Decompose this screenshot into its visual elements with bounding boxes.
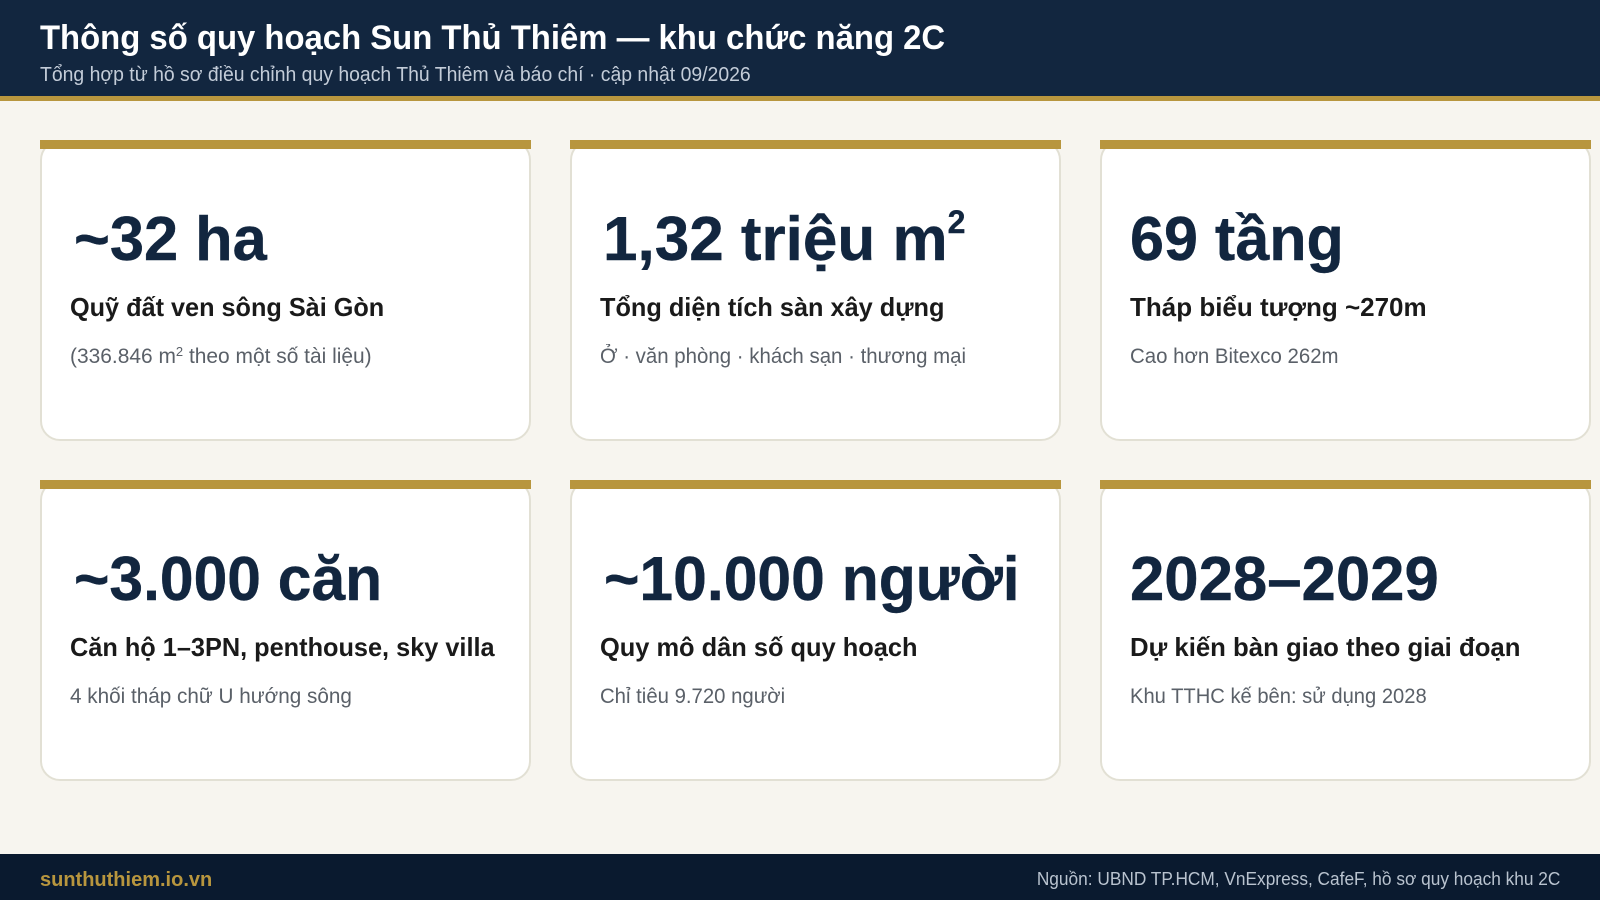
card: population: [570, 480, 1061, 780]
footer band: [0, 854, 1600, 900]
card: floor area: [570, 140, 1061, 440]
label: land area: Quỹ đất ven sông Sài Gòn: [70, 292, 384, 322]
label: tower height: Tháp biểu tượng ~270m: [1130, 292, 1427, 322]
card: apartments: [40, 480, 531, 780]
footer brand: sunthuthiem.io.vn: [40, 869, 212, 891]
footer sources: Nguồn: UBND TP.HCM, VnExpress, CafeF, hồ sơ quy hoạch khu 2C: [1036, 869, 1560, 889]
value: land area: ~32 ha: [74, 205, 267, 274]
detail: floor area: Ở · văn phòng · khách sạn · thương mại: [600, 345, 966, 368]
value: population: ~10.000 người: [604, 545, 1020, 614]
detail: apartments: 4 khối tháp chữ U hướng sông: [70, 685, 352, 708]
value: handover: 2028–2029: [1130, 545, 1439, 614]
title: Thông số quy hoạch Sun Thủ Thiêm — khu chức năng 2C: [40, 19, 945, 57]
detail: land area: (336.846 m2 theo một số tài liệu): [70, 344, 372, 368]
subtitle: Tổng hợp từ hồ sơ điều chỉnh quy hoạch Thủ Thiêm và báo chí · cập nhật 09/2026: [40, 64, 751, 86]
detail: tower height: Cao hơn Bitexco 262m: [1130, 345, 1339, 368]
value: floor area: 1,32 triệu m2: [603, 204, 965, 274]
value: apartments: ~3.000 căn: [74, 545, 382, 614]
detail: population: Chỉ tiêu 9.720 người: [600, 685, 785, 708]
label: handover: Dự kiến bàn giao theo giai đoạn: [1130, 632, 1520, 662]
value: tower height: 69 tầng: [1130, 205, 1344, 274]
label: population: Quy mô dân số quy hoạch: [600, 632, 918, 662]
label: floor area: Tổng diện tích sàn xây dựng: [600, 292, 944, 322]
detail: handover: Khu TTHC kế bên: sử dụng 2028: [1130, 685, 1427, 708]
card: land area: [40, 140, 531, 440]
card: handover: [1100, 480, 1591, 780]
card: tower height: [1100, 140, 1591, 440]
label: apartments: Căn hộ 1–3PN, penthouse, sky villa: [70, 632, 495, 662]
header band: [0, 0, 1600, 101]
